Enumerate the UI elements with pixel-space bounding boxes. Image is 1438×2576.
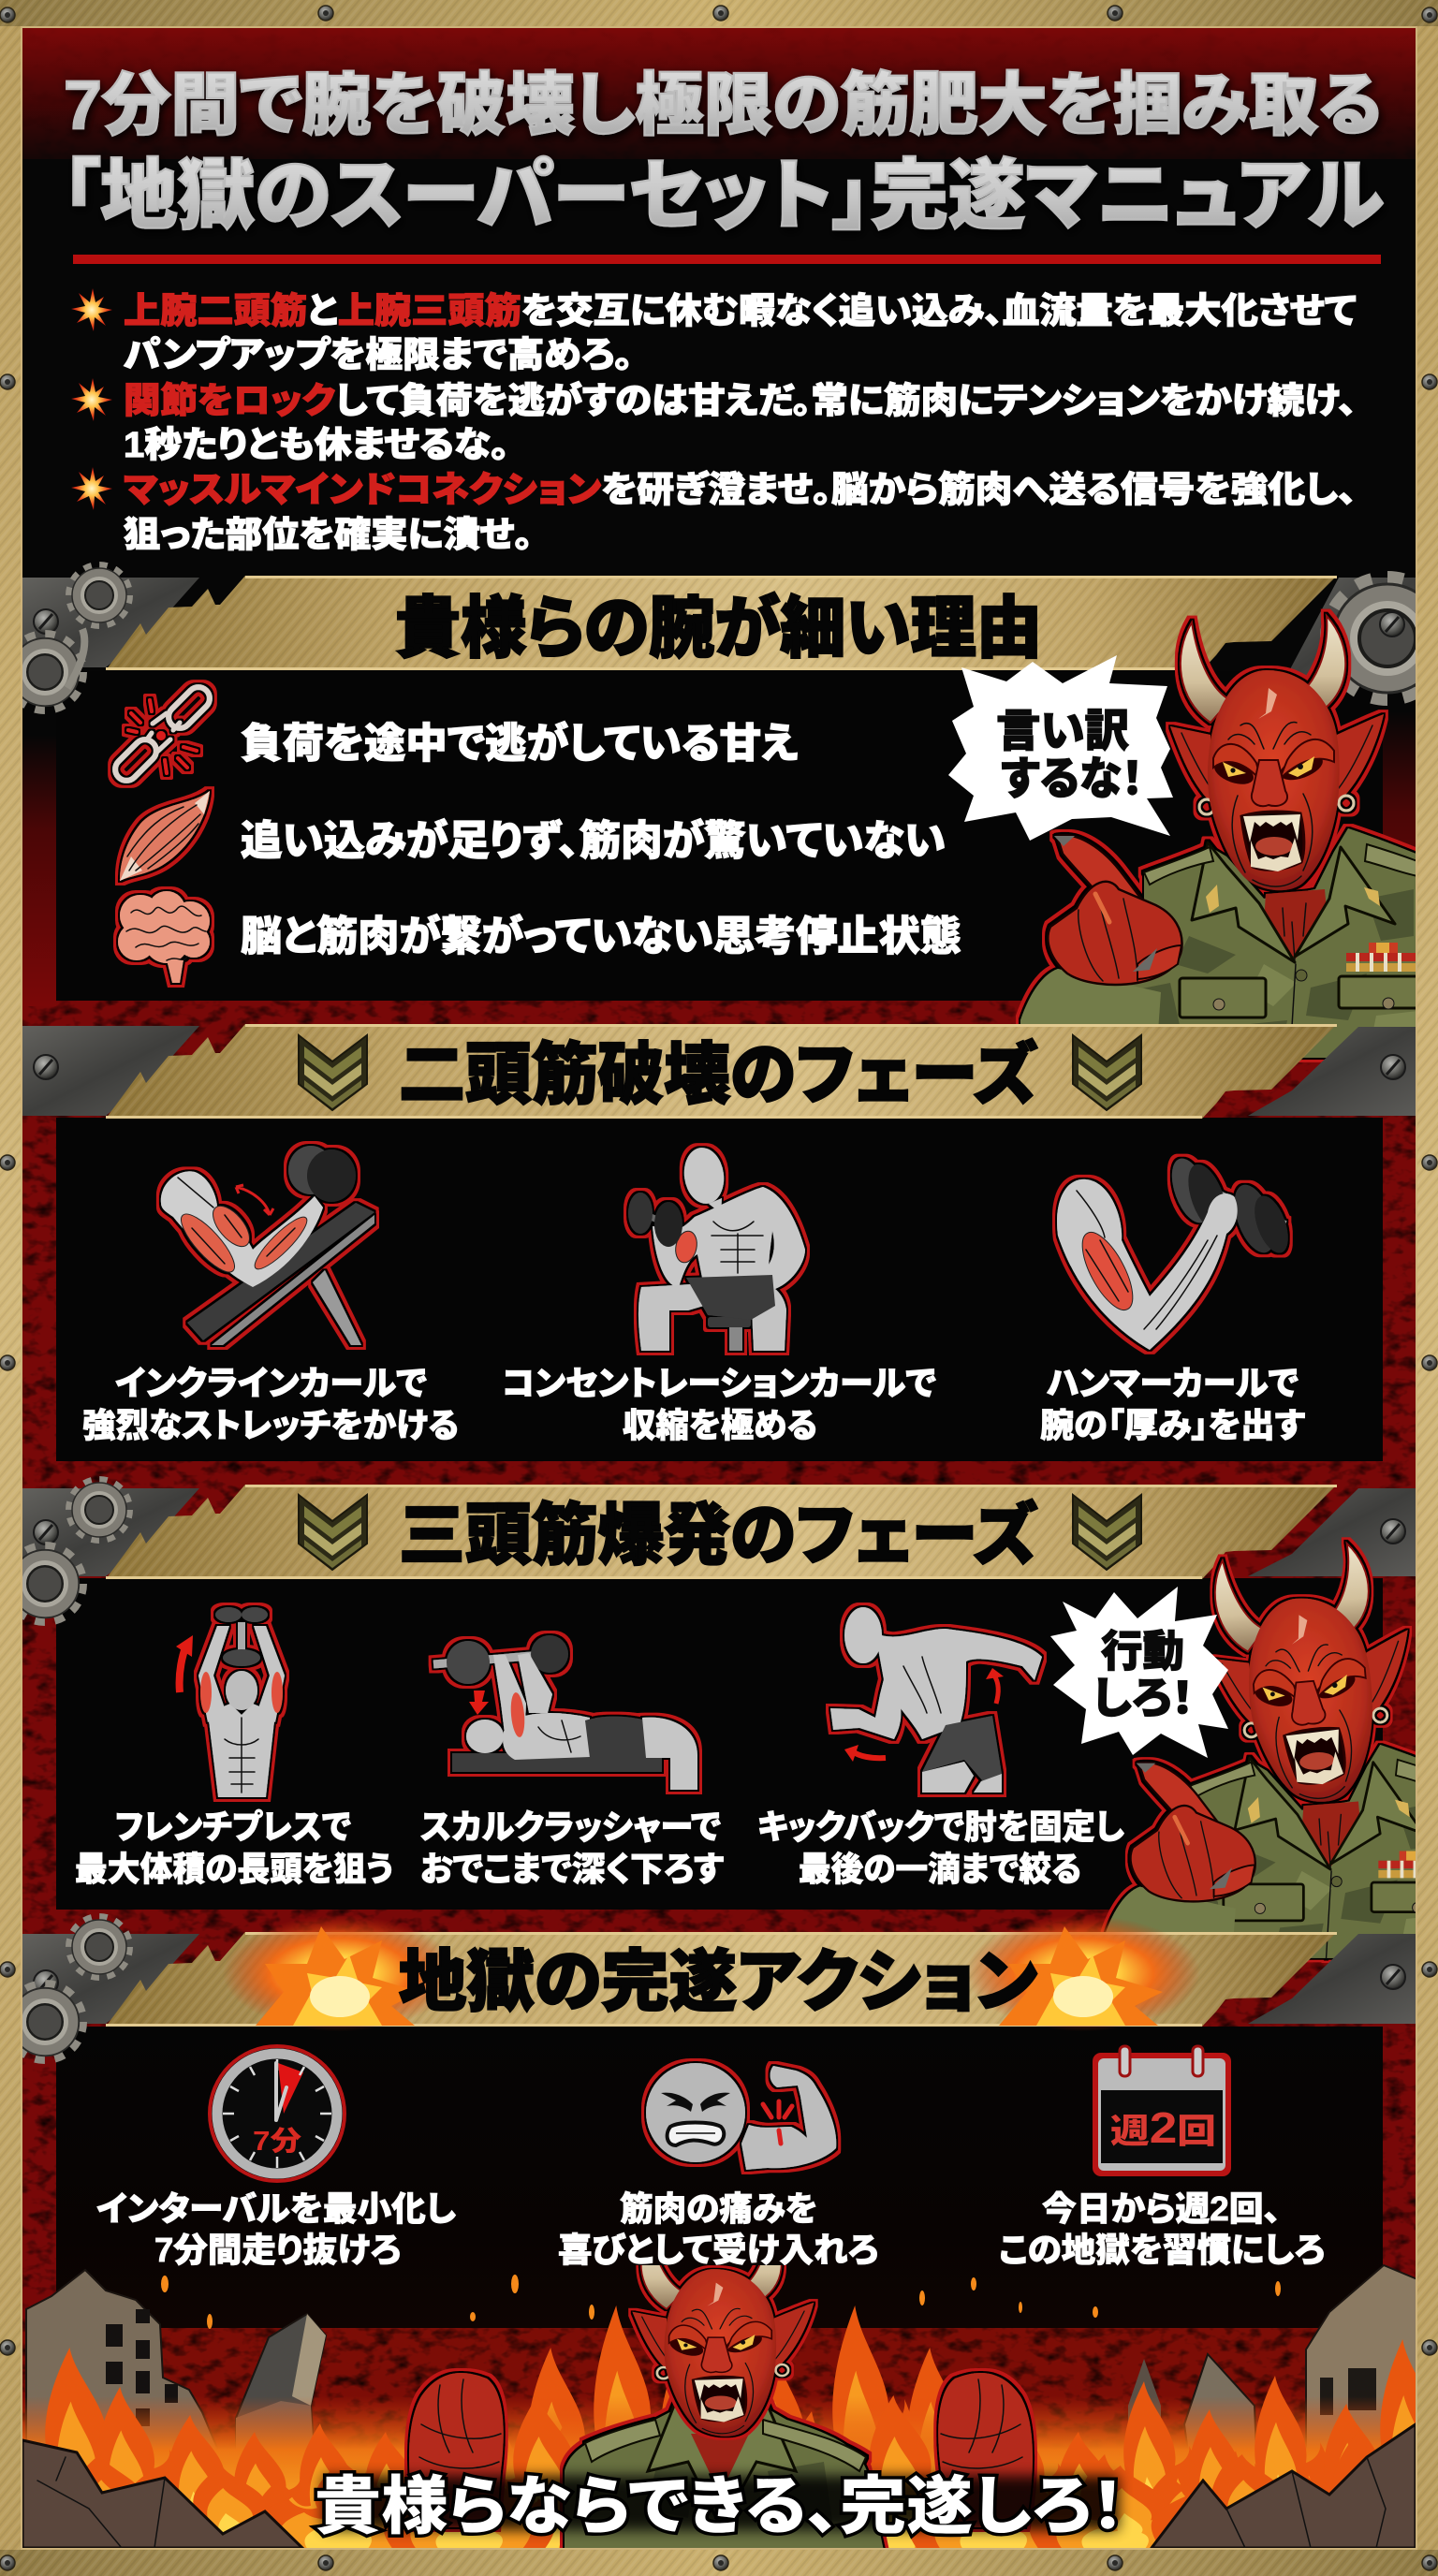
caption 1 line 2: 7分間走り抜けろ: [154, 2231, 401, 2269]
icon: kickback: [830, 1607, 1042, 1793]
bullet 3 line 1: マッスルマインドコネクション を研ぎ澄ませ。脳から筋肉へ送る信号を強化し、: [124, 470, 1357, 510]
banner: biceps: [106, 1024, 1337, 1119]
arrow: skull crusher down: [469, 1690, 489, 1715]
banner: reasons: [106, 576, 1337, 670]
icon detail: pain sparks: [763, 2101, 792, 2144]
caption 1 line 2: 最大体積の長頭を狙う: [75, 1850, 393, 1888]
closing line: 貴様らならできる、完遂しろ！: [315, 2471, 1124, 2542]
demon head: [628, 2265, 818, 2440]
banner: triceps: [106, 1485, 1337, 1579]
icon: broken chain: [110, 682, 214, 785]
back flames: [507, 2305, 944, 2447]
title line 1: 7分間で腕を破壊し極限の筋肥大を掴み取る: [64, 67, 1382, 143]
bullet 1 line 1: 上腕二頭筋と上腕三頭筋を交互に休む暇なく追い込み、血流量を最大化させて: [124, 292, 1357, 331]
caption 3 line 2: 最後の一滴まで絞る: [799, 1850, 1081, 1888]
fist left: [409, 2373, 504, 2527]
title line 2: 「地獄のスーパーセット」完遂マニュアル: [62, 154, 1384, 239]
bullet 3 line 2: 狙った部位を確実に潰せ。: [124, 516, 533, 555]
bullet icon 2: [71, 378, 112, 421]
reason text 2: 追い込みが足りず、筋肉が驚いていない: [241, 817, 946, 864]
reason text 3: 脳と筋肉が繋がっていない思考停止状態: [241, 913, 961, 959]
caption 3 line 1: キックバックで肘を固定し: [757, 1808, 1124, 1846]
gears and plates: action: [7, 1917, 1417, 2059]
banner heading: 地獄の完遂アクション: [399, 1945, 1037, 2020]
metal plates: biceps: [22, 1026, 1417, 1116]
caption 2 line 2: おでこまで深く下ろす: [420, 1850, 724, 1888]
gear and plate: reasons right: [1290, 571, 1416, 706]
metal plate with gears: reasons left: [7, 565, 199, 710]
stopwatch label: 7分: [253, 2126, 301, 2157]
caption 3 line 1: 今日から週2回、: [1042, 2189, 1281, 2228]
ruined buildings: [25, 2263, 1416, 2446]
icon: muscle: [120, 791, 210, 881]
embers: [161, 2275, 1281, 2329]
title: [62, 67, 1384, 239]
chevron right: [1073, 1495, 1141, 1570]
panel: biceps background: [56, 1118, 1383, 1461]
bubble text line 2: するな！: [1001, 754, 1143, 804]
caption 2 line 1: コンセントレーションカールで: [502, 1364, 936, 1402]
arrow: kickback up: [986, 1668, 1004, 1704]
caption 1 line 1: インターバルを最小化し: [96, 2189, 456, 2228]
panel: action background: [21, 2027, 1417, 2550]
icon: hammer curl: [1057, 1153, 1295, 1350]
icon: french press: [198, 1607, 285, 1797]
closing message: [315, 2471, 1124, 2542]
gears and plates: triceps: [7, 1480, 1417, 1621]
captions: biceps phase: [82, 1364, 1305, 1444]
arrow: kickback left: [844, 1745, 886, 1762]
banner heading: 二頭筋破壊のフェーズ: [399, 1038, 1038, 1113]
calendar label: 週2回: [1110, 2103, 1216, 2152]
caption 2 line 1: スカルクラッシャーで: [420, 1808, 721, 1846]
icon: concentration curl: [628, 1145, 805, 1351]
bubble text line 1: 言い訳: [996, 707, 1129, 756]
panel: intro background: [21, 26, 1417, 576]
chevron right: [1073, 1035, 1141, 1110]
panel: triceps background: [56, 1578, 1383, 1910]
text halo: [323, 2476, 1119, 2530]
explosion right: [966, 1915, 1200, 2031]
rocks: [22, 2424, 1416, 2548]
banner: action: [106, 1915, 1337, 2031]
captions: action: [96, 2189, 1325, 2269]
caption 1 line 2: 強烈なストレッチをかける: [82, 1406, 459, 1444]
caption 3 line 2: この地獄を習慣にしろ: [999, 2231, 1325, 2269]
speech bubble: act: [1050, 1587, 1228, 1758]
caption 3 line 1: ハンマーカールで: [1047, 1364, 1299, 1402]
arrow: french press up: [176, 1635, 193, 1692]
demon sergeant pointing: [1020, 616, 1423, 1058]
icon: pained face and flexed arm: [646, 2063, 836, 2170]
caption 3 line 2: 腕の「厚み」を出す: [1040, 1406, 1305, 1444]
banner heading: 三頭筋爆発のフェーズ: [399, 1499, 1038, 1573]
demon sergeant second: [1105, 1539, 1438, 1969]
icon: skull crusher: [433, 1635, 697, 1790]
icon: stopwatch: [208, 2044, 346, 2183]
bubble text line 1: 行動: [1101, 1627, 1184, 1676]
reason text 1: 負荷を途中で逃がしている甘え: [241, 720, 799, 767]
caption 2 line 1: 筋肉の痛みを: [620, 2189, 817, 2228]
intro bullet list: [71, 288, 1357, 555]
panel: reasons background: [21, 576, 1417, 1006]
bullet 2 line 2: 1秒たりとも休ませるな。: [124, 426, 509, 465]
caption 1 line 1: インクラインカールで: [115, 1364, 427, 1402]
bullet 2 line 1: 関節をロックして負荷を逃がすのは甘えだ。常に筋肉にテンションをかけ続け、: [124, 381, 1357, 421]
chevron left: [299, 1035, 367, 1110]
bullet icon 3: [71, 467, 112, 510]
demon sergeant final: [404, 2265, 1037, 2548]
banner heading: 貴様らの腕が細い理由: [395, 592, 1042, 666]
arrow: stretch range: [236, 1185, 273, 1215]
red divider: [73, 255, 1381, 264]
icon: incline curl: [161, 1146, 374, 1345]
bullet 1 line 2: パンプアップを極限まで高めろ。: [124, 336, 633, 375]
icon: calendar: [1093, 2046, 1231, 2176]
bubble text line 2: しろ！: [1093, 1674, 1194, 1722]
bullet icon 1: [71, 288, 112, 331]
captions: triceps phase: [75, 1808, 1124, 1888]
caption 2 line 2: 喜びとして受け入れろ: [558, 2231, 878, 2269]
icon: brain: [118, 891, 210, 983]
caption 1 line 1: フレンチプレスで: [115, 1808, 351, 1846]
fist right: [938, 2373, 1033, 2527]
flames: [0, 2339, 1438, 2550]
explosion left: [223, 1915, 457, 2031]
caption 2 line 2: 収縮を極める: [623, 1406, 817, 1444]
chevron left: [299, 1495, 367, 1570]
speech bubble: excuses: [948, 655, 1173, 841]
jacket: [565, 2398, 885, 2555]
